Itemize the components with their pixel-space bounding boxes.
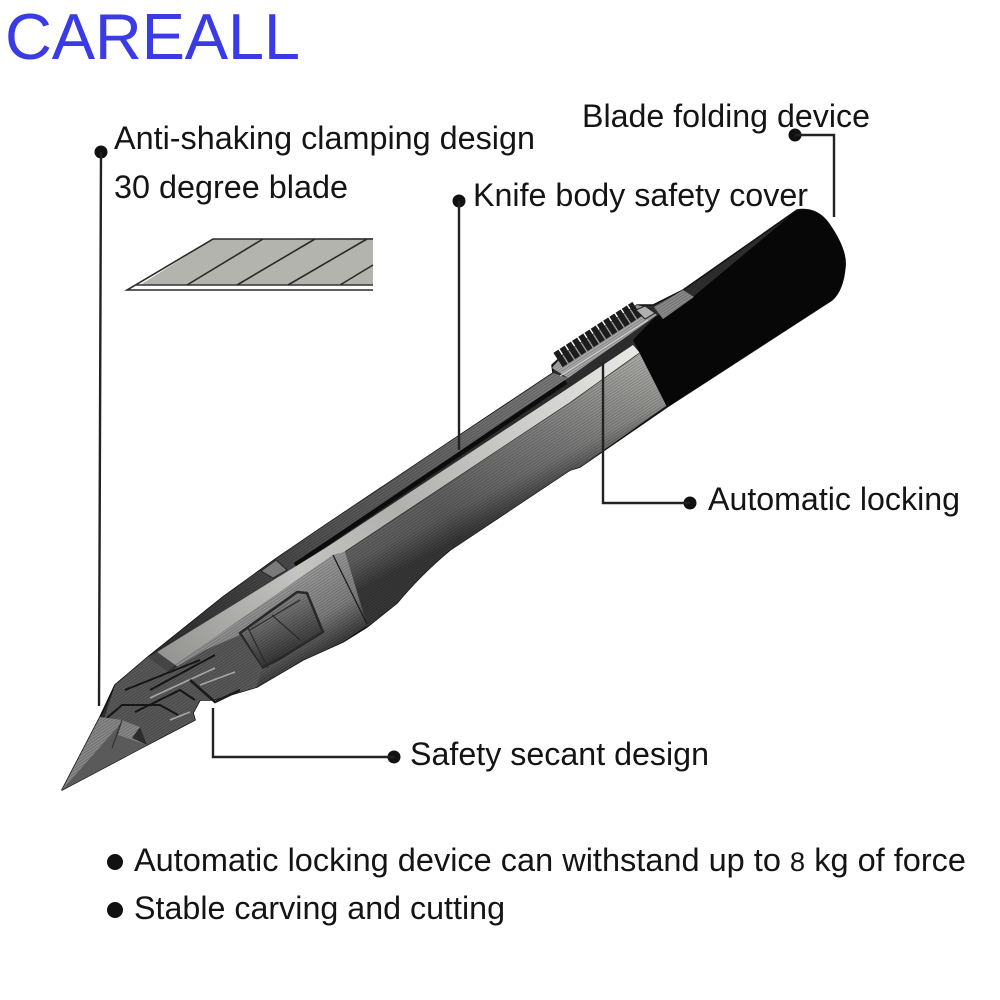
bullet: stable carving: Stable carving and cutting	[134, 890, 505, 926]
label: blade folding device	[582, 98, 870, 217]
bullet: withstand force: Automatic locking device can withstand up to 8 kg of force	[134, 842, 966, 878]
rail latch	[261, 560, 287, 578]
label: anti-shaking clamping design: Anti-shaking clamping design	[114, 120, 535, 156]
grip body	[345, 353, 667, 627]
label: safety secant design	[213, 708, 709, 772]
label: knife body safety cover	[452, 177, 808, 450]
upper rail	[148, 373, 568, 668]
label: automatic locking: Automatic locking	[708, 481, 960, 517]
blade carrier	[103, 635, 262, 745]
knife silhouette	[62, 210, 845, 790]
nose window	[240, 592, 323, 668]
nose section	[175, 552, 367, 695]
label: 30 degree blade: 30 degree blade	[114, 169, 348, 205]
label: automatic locking	[603, 362, 960, 517]
dark groove	[295, 382, 566, 565]
title: CAREALL	[5, 0, 300, 73]
label: safety secant design: Safety secant design	[410, 736, 709, 772]
label: blade folding device: Blade folding device	[582, 98, 870, 134]
label: anti-shaking clamping design	[94, 120, 535, 706]
black end cap	[633, 210, 845, 407]
illustration: utility knife	[62, 210, 845, 790]
strip end cap	[148, 652, 175, 672]
knife tip blade	[62, 717, 147, 790]
label: knife body safety cover: Knife body safety cover	[473, 177, 808, 213]
light strip	[157, 345, 640, 665]
toothed slider	[552, 305, 657, 378]
icon: snap-off blade	[127, 238, 373, 290]
